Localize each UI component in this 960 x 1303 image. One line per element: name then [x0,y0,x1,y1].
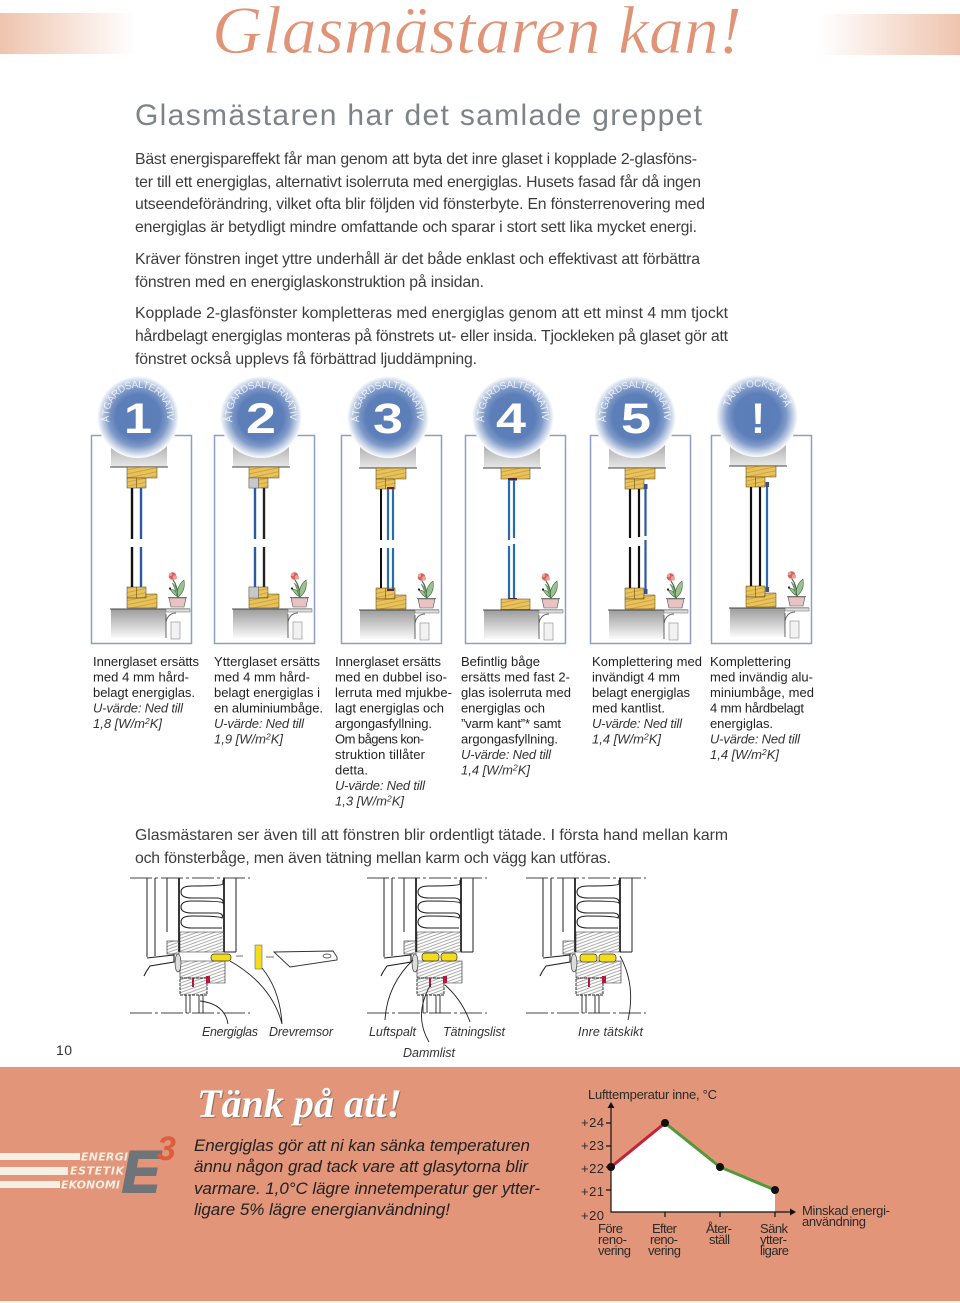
caption: think also about: energiglas. [710,716,773,731]
caption: think also about: 2 [761,747,767,757]
caption: alternative 3: U-värde: Ned till [335,778,426,793]
panel: think also about [710,376,812,644]
panel: think about band [0,1067,960,1303]
caption: alternative 5: med kantlist. [592,700,665,716]
caption: alternative 3: med en dubbel iso- [335,670,447,684]
caption: think also about: U-värde: Ned till [710,732,801,746]
data lines [611,1123,665,1167]
diagram: section with inner sealing layer [526,878,646,1020]
intro text block: Kräver fönstren inget yttre underhåll är det både enklast och effektivast att förbättra [135,250,700,268]
x labels: Åter- [706,1221,732,1236]
caption: alternative 1: U-värde: Ned till [93,700,184,716]
caption: alternative 4: glas isolerruta med [461,685,571,700]
panel: alternative 5 [590,376,692,644]
caption: alternative 4 [461,654,571,778]
caption: think also about: 4 mm hårdbelagt [710,700,804,716]
diagram labels: Drevremsor [269,1025,334,1039]
caption: think also about [710,654,814,762]
diagram: section with two strips and seal [367,878,487,1042]
data points [607,1119,779,1194]
caption: alternative 3: lerruta med mjukbe- [335,685,452,700]
chart title: Lufttemperatur inne, °C [588,1087,717,1102]
intro text block: Bäst energispareffekt får man genom att byta det inre glaset i kopplade 2-glasföns- [135,150,697,168]
panel: alternative 1: ÅTGÄRDSALTERNATIV [100,380,174,422]
caption: alternative 3: detta. [335,762,368,778]
falling data line [665,1123,775,1190]
panel: think also about: TÄNK OCKSÅ PÅ [723,380,792,408]
y labels: +24 [581,1115,604,1130]
caption: alternative 2: en aluminiumbåge. [214,700,323,716]
intro text block [135,150,729,368]
intro text block: energiglas är betydligt mindre omfattande och sparar i stort sett lika mycket energi. [135,219,697,236]
panel: alternative 1 [90,376,192,644]
diagram: section with draught strips [130,878,337,1024]
panel: alternative 3 [340,376,442,644]
callout text: Energiglas gör att ni kan sänka temperaturen [194,1136,530,1155]
caption: alternative 2: K] [271,732,283,746]
callout text: varmare. 1,0°C lägre innetemperatur ger ytter- [194,1179,540,1198]
caption: alternative 3: 1,3 [W/m [335,794,387,808]
y labels [581,1115,604,1223]
caption: alternative 4: energiglas och [461,700,545,716]
logo: E3: E [122,1140,162,1205]
panel: alternative 1: 1 [124,395,152,443]
caption: alternative 4: argongasfyllning. [461,732,558,746]
logo: E3: ENERGI [81,1150,128,1164]
y labels: +23 [581,1138,604,1153]
panel: alternative 5: ÅTGÄRDSALTERNATIV [597,380,671,422]
caption: alternative 5: Komplettering med [592,654,702,669]
caption: think also about: Komplettering [710,654,791,669]
caption: alternative 2: Ytterglaset ersätts [214,654,320,669]
caption: alternative 5: 2 [643,732,649,742]
callout heading: Tänk på att! [197,1081,402,1126]
callout text: ännu någon grad tack vare att glasytorna blir [194,1157,529,1176]
caption: alternative 3: 2 [386,794,392,804]
caption: alternative 1 [93,654,200,731]
caption: think also about: miniumbåge, med [710,685,814,700]
line chart: indoor temperature [581,1087,890,1258]
intro text block: Kopplade 2-glasfönster kompletteras med energiglas genom att ett minst 4 mm tjockt [135,305,729,322]
x labels: vering [598,1243,631,1258]
caption: alternative 3: argongasfyllning. [335,716,432,731]
caption: alternative 5: 1,4 [W/m [592,732,644,746]
caption: alternative 5: K] [649,732,661,746]
sealing paragraph [135,827,728,867]
panel: alternative 2: ÅTGÄRDSALTERNATIV [223,380,297,422]
y labels: +21 [581,1184,604,1199]
x labels: reno- [598,1232,627,1247]
x labels: ställ [709,1232,730,1247]
panel: alternative 3: 3 [373,395,403,443]
y labels: +20 [581,1208,604,1223]
caption: alternative 4: ersätts med fast 2- [461,670,570,684]
caption: alternative 4: U-värde: Ned till [461,747,552,762]
callout text: ligare 5% lägre energianvändning! [194,1200,450,1219]
diagram labels: Energiglas [202,1025,258,1039]
x labels: Efter [652,1221,678,1236]
panel: alternative 4: ÅTGÄRDSALTERNATIV [475,380,549,422]
caption: alternative 5 [592,654,702,746]
right header gradient bar [820,14,960,55]
caption: alternative 2: 2 [265,732,271,742]
panel: alternative 4: 4 [496,395,526,443]
diagram labels [202,1025,644,1060]
caption: alternative 1: Innerglaset ersätts [93,654,200,669]
diagram labels: Dammlist [403,1046,456,1060]
caption: alternative 4: 1,4 [W/m [461,762,513,778]
x labels [598,1203,890,1258]
caption: alternative 2: 1,9 [W/m [214,732,266,746]
caption: alternative 4: 2 [512,762,518,772]
chart axes [606,1106,791,1217]
logo: E3: 3 [157,1130,176,1168]
intro text block: ter till ett energiglas, alternativt isolerruta med energiglas. Husets fasad får då ingen [135,173,701,191]
sealing paragraph: Glasmästaren ser även till att fönstren blir ordentligt tätade. I första hand mellan karm [135,827,728,844]
caption: alternative 1: med 4 mm hård- [93,670,189,684]
x labels: reno- [650,1232,678,1247]
caption: think also about: med invändig alu- [710,670,813,684]
x labels: Sänk [760,1221,788,1236]
caption: alternative 1: 1,8 [W/m [93,716,145,731]
panel: alternative 3: ÅTGÄRDSALTERNATIV [350,380,424,422]
caption: alternative 4: Befintlig båge [461,654,540,669]
callout text [194,1136,540,1219]
intro text block: hårdbelagt energiglas monteras på fönstrets ut- eller insida. Tjockleken på glaset gör att [135,327,729,345]
caption: alternative 4: K] [518,762,530,778]
caption: alternative 3: lagt energiglas och [335,700,444,716]
sealing paragraph: och fönsterbåge, men även tätning mellan karm och vägg kan utföras. [135,849,611,867]
panel: alternative 5: 5 [621,395,651,443]
panel: alternative 4 [464,376,566,644]
caption: alternative 2: belagt energiglas i [214,685,320,700]
logo: E3: ESTETIK [70,1164,125,1178]
caption: alternative 2: U-värde: Ned till [214,716,305,731]
left header gradient bar [0,13,135,54]
x labels: ytter- [760,1232,787,1247]
caption: think also about: 1,4 [W/m [710,747,762,762]
intro text block: utseendeförändring, vilket ofta blir följden vid fönsterbyte. En fönsterrenovering med [135,196,705,213]
page number: 10 [56,1042,72,1058]
logo: E3: EKONOMI [61,1178,120,1192]
caption: alternative 3: Innerglaset ersätts [335,654,442,669]
intro text block: fönstren med en energiglaskonstruktion på insidan. [135,273,484,291]
panel: alternative 2: 2 [246,395,276,443]
caption: think also about: K] [767,747,779,762]
caption: alternative 5: belagt energiglas [592,685,690,700]
caption: alternative 5: U-värde: Ned till [592,716,683,731]
caption: alternative 5: invändigt 4 mm [592,670,680,684]
caption: alternative 2: med 4 mm hård- [214,670,310,684]
x labels: Minskad energi- [802,1203,890,1218]
y labels: +22 [581,1161,604,1176]
panel: think also about: ! [751,395,765,443]
caption: alternative 3: struktion tillåter [335,747,426,762]
logo: E3 [0,1130,176,1205]
caption: alternative 4: ”varm kant”* samt [461,716,561,731]
x labels: Före [598,1221,623,1236]
axis arrows [608,1102,796,1216]
caption: alternative 3 [335,654,452,808]
x labels: användning [802,1214,866,1229]
intro text block: fönstret också upplevs få förbättrad ljuddämpning. [135,350,477,368]
diagram labels: Inre tätskikt [578,1025,644,1039]
caption: alternative 1: 2 [144,716,150,726]
caption: alternative 3: Om bågens kon- [335,732,424,746]
caption: alternative 1: belagt energiglas. [93,685,195,700]
diagram labels: Luftspalt [369,1025,417,1039]
x labels: ligare [760,1243,789,1258]
caption: alternative 1: K] [150,716,162,731]
heading: Glasmästaren har det samlade greppet [135,99,703,132]
diagram labels: Tätningslist [443,1025,506,1039]
chart area [611,1123,775,1212]
caption: alternative 3: K] [392,794,404,808]
panel: alternative 2 [214,376,316,644]
x labels: vering [648,1243,681,1258]
caption: alternative 2 [214,654,323,746]
